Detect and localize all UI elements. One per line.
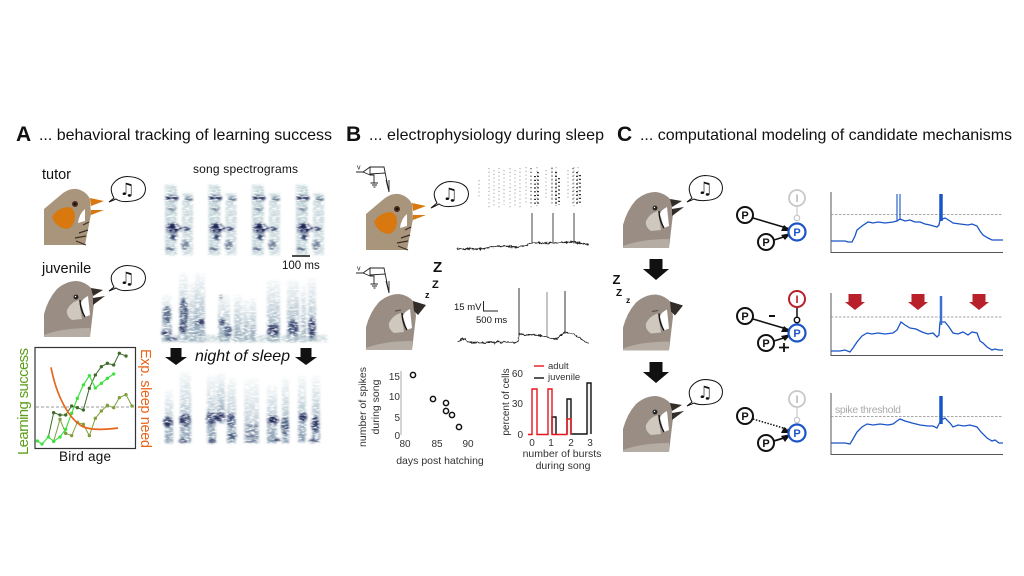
network diagram 2: P [793, 328, 801, 340]
icon: speech bubble with music note: ♫ [697, 383, 713, 403]
icon: speech bubble with music note [109, 176, 146, 202]
label: spike threshold: spike threshold [835, 404, 901, 416]
histogram: bursts during song: number of bursts [523, 448, 601, 460]
tutor spectrograms [165, 185, 324, 255]
heading C: C [617, 123, 632, 146]
scatter plot: spikes vs age: 80 [399, 439, 411, 450]
series: sleep need curve [51, 367, 118, 429]
network diagram 3: P [762, 438, 770, 450]
post-sleep spectrogram [163, 372, 320, 443]
network diagram 2 [737, 291, 806, 352]
panel C: computational modeling [612, 123, 1012, 454]
histogram: bursts during song: 3 [587, 438, 593, 449]
network diagram 3: P [741, 411, 749, 423]
histogram: bursts during song [501, 361, 601, 472]
label: juvenile: juvenile [41, 261, 91, 277]
simulated voltage plot 3 [831, 393, 1003, 454]
network diagram 1 [737, 190, 806, 250]
arrow: down to morning [643, 362, 669, 383]
icon: singing bird after sleep [623, 396, 684, 452]
scale bar 100 ms: 100 ms [282, 260, 320, 272]
icon: recording amplifier bottom [356, 268, 389, 293]
network diagram 1: P [741, 210, 749, 222]
scale bar 15 mV and 500 ms: 15 mV [454, 302, 482, 313]
icon: tutor bird with electrode [366, 194, 426, 250]
network diagram 2: P [741, 311, 749, 323]
simulated voltage plot 2 [831, 293, 1003, 356]
heading A [16, 123, 332, 146]
network diagram 3 [737, 391, 806, 451]
histogram: bursts during song: 30 [512, 399, 523, 410]
heading B: ... electrophysiology during sleep [369, 127, 604, 144]
network diagram 3: P [793, 428, 801, 440]
icon: speech bubble with music note [687, 380, 722, 406]
scale bar 15 mV and 500 ms [454, 301, 507, 326]
icon: sleep Z letters: z [425, 290, 430, 300]
icon: speech bubble with music note: ♫ [697, 179, 713, 199]
icon: juvenile bird [44, 281, 105, 337]
icon: speech bubble with music note: ♫ [119, 180, 135, 200]
icon: speech bubble with music note [109, 266, 146, 291]
simulated voltage plot 1 [831, 192, 1003, 252]
scale bar 15 mV and 500 ms: 500 ms [476, 315, 507, 326]
scatter plot: spikes vs age: during song [370, 379, 382, 434]
histogram: bursts during song: adult [548, 361, 569, 372]
icon: sleep Z letters: Z [433, 259, 442, 276]
histogram: bursts during song: percent of cells [501, 368, 512, 436]
scatter plot: spikes vs age: days post hatching [396, 455, 484, 467]
heading C [617, 123, 1012, 146]
arrow: right down arrow [295, 348, 317, 365]
scatter plot: spikes vs age: 0 [394, 431, 400, 442]
panel A: behavioral tracking [15, 123, 332, 464]
arrow: left down arrow [165, 348, 187, 365]
network diagram 3: I [795, 394, 799, 406]
raster plot [479, 167, 580, 208]
icon: sleep Z letters: Z [612, 272, 620, 287]
scatter plot: spikes vs age: 10 [389, 392, 400, 403]
scatter plot: spikes vs age [357, 367, 484, 467]
label: v: v [357, 266, 361, 272]
icon: speech bubble with music note [431, 182, 468, 208]
series: olive green bird [54, 395, 132, 441]
icon: speech bubble with music note: ♫ [119, 269, 135, 289]
heading A: A [16, 123, 31, 146]
histogram: bursts during song: 2 [568, 438, 574, 449]
heading C: ... computational modeling of candidate mechanisms [640, 127, 1012, 144]
icon: speech bubble with music note: ♫ [442, 185, 458, 205]
juvenile spectrogram [161, 273, 327, 342]
panel B: electrophysiology during sleep [346, 123, 604, 472]
icon: sleep Z letters: z [626, 295, 630, 305]
icon: sleeping bird with electrode [366, 294, 426, 350]
icon: singing bird before sleep [623, 192, 684, 248]
network diagram 2: P [762, 338, 770, 350]
label: tutor: tutor [42, 167, 71, 183]
series: bright green bird [37, 374, 114, 444]
icon: recording amplifier top [356, 167, 389, 192]
histogram: bursts during song: 0 [517, 430, 523, 441]
label: v: v [357, 164, 361, 172]
network diagram 2: I [795, 294, 799, 306]
icon: sleep Z letters: Z [432, 279, 439, 291]
axis label: learning success: Learning success [15, 348, 32, 455]
inhibition arrows [845, 294, 989, 310]
scatter plot: spikes vs age: 85 [431, 439, 443, 450]
chart: learning success and sleep need [35, 348, 136, 448]
icon: sleep Z letters [612, 272, 630, 305]
histogram: bursts during song: juvenile [547, 372, 580, 383]
label: night of sleep: night of sleep [195, 348, 290, 365]
trace: membrane potential during sleep [457, 288, 589, 343]
histogram: bursts during song: during song [536, 460, 591, 472]
icon: tutor bird [44, 189, 104, 245]
scatter plot: spikes vs age: number of spikes [357, 367, 369, 447]
network diagram 1: P [793, 227, 801, 239]
axis label: bird age: Bird age [59, 449, 111, 464]
histogram: bursts during song: 0 [529, 438, 535, 449]
network diagram 1: I [795, 193, 799, 205]
network diagram 1: P [762, 237, 770, 249]
icon: sleep Z letters: Z [616, 288, 622, 299]
icon: speech bubble with music note [687, 176, 722, 202]
scatter plot: spikes vs age: 5 [394, 413, 400, 424]
histogram: bursts during song: 60 [512, 369, 523, 380]
series: dark green bird [48, 353, 126, 437]
trace: membrane potential during song [457, 213, 589, 249]
axis label: expected sleep need: Exp. sleep need [137, 349, 153, 448]
arrow: down to sleep [643, 259, 669, 280]
scatter plot: spikes vs age: 90 [462, 439, 474, 450]
label: song spectrograms: song spectrograms [193, 162, 298, 176]
icon: sleeping bird [623, 294, 683, 350]
icon: sleep Z letters [425, 259, 442, 300]
heading A: ... behavioral tracking of learning success [39, 127, 332, 144]
histogram: bursts during song: 1 [548, 438, 554, 449]
scatter plot: spikes vs age: 15 [389, 372, 400, 383]
heading B: B [346, 123, 361, 146]
heading B [346, 123, 604, 146]
